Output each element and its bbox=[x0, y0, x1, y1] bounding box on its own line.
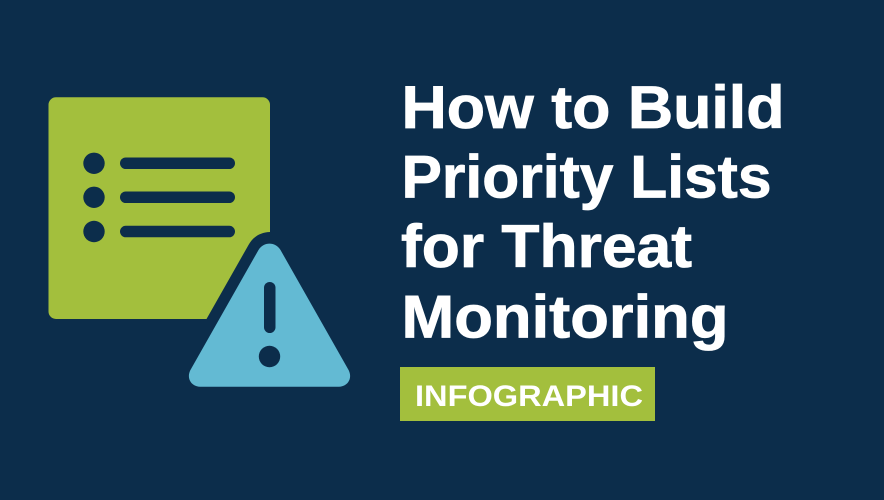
list lines bbox=[120, 158, 235, 237]
exclamation mark bbox=[259, 282, 280, 367]
icon: green document bbox=[48, 97, 270, 319]
title: How to Build bbox=[402, 74, 784, 141]
title bbox=[401, 74, 784, 350]
icon: warning triangle bbox=[189, 244, 350, 387]
title: Priority Lists bbox=[402, 144, 772, 210]
badge: infographic: INFOGRAPHIC bbox=[415, 380, 643, 413]
badge: infographic bbox=[400, 367, 655, 421]
title: Monitoring bbox=[402, 284, 728, 350]
icon: priority list document with warning bbox=[48, 97, 350, 387]
title: for Threat bbox=[401, 213, 692, 280]
list bullets bbox=[83, 153, 105, 242]
